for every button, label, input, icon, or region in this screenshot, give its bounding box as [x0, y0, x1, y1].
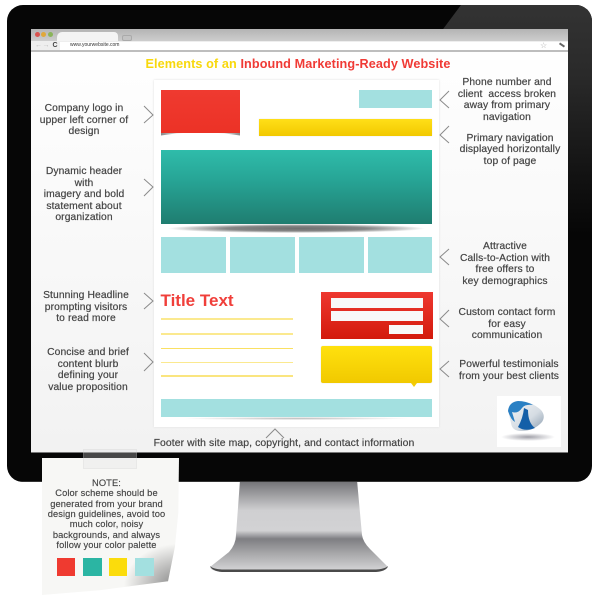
- label: content blurb: Concise and brief: [47, 347, 129, 358]
- title text: Title Text: [160, 291, 234, 310]
- label: dynamic header: Dynamic header: [46, 166, 122, 177]
- star: ☆: [540, 40, 547, 50]
- swatch red: [57, 558, 75, 576]
- form field 1: [331, 298, 423, 308]
- label: dynamic header: statement about: [46, 200, 122, 212]
- label: headline: Stunning Headline: [43, 290, 129, 301]
- cta 4: [368, 237, 432, 273]
- label: dynamic header: organization: [55, 212, 113, 223]
- note text: generated from your brand: [50, 499, 163, 509]
- note text: much color, noisy: [70, 519, 143, 529]
- label: headline: [43, 290, 129, 324]
- swatch teal: [82, 558, 102, 576]
- label: logo: [40, 103, 128, 137]
- label: phone number: [458, 77, 556, 122]
- label: calls to action: Calls-to-Action with: [460, 252, 550, 264]
- note curl shading: [128, 547, 174, 586]
- url: www.yourwebsite.com: [70, 42, 119, 48]
- monitor frame: [7, 5, 592, 482]
- label: logo: design: [69, 126, 99, 137]
- label: footer: Footer with site map, copyright, and contact information: [154, 438, 414, 449]
- browser chrome: [31, 29, 568, 52]
- testimonial bubble: [321, 346, 432, 383]
- title: Elements of an Inbound Marketing-Ready Website: [146, 57, 450, 71]
- sticky note: [42, 458, 179, 595]
- label: dynamic header: [44, 166, 124, 223]
- calls to action: [161, 237, 432, 273]
- submit button: [389, 324, 423, 334]
- label: dynamic header: imagery and bold: [44, 189, 124, 200]
- label: phone number: away from primary: [464, 100, 550, 111]
- label: testimonials: Powerful testimonials: [459, 359, 559, 370]
- label: calls to action: key demographics: [462, 276, 548, 286]
- label: testimonials: [459, 359, 559, 382]
- cta 2: [230, 237, 295, 273]
- swatch aqua: [134, 558, 154, 576]
- note text: follow your color palette: [56, 540, 157, 550]
- footer shadow: [184, 416, 409, 420]
- note text: Color scheme should be: [55, 488, 158, 498]
- label: phone number: navigation: [483, 112, 531, 122]
- address bar: [60, 42, 568, 50]
- label: primary navigation: [460, 132, 560, 166]
- label: headline: prompting visitors: [45, 302, 127, 312]
- wireframe panel: [154, 80, 439, 427]
- navigation bar: [259, 119, 432, 136]
- note text: design guidelines, avoid too: [48, 509, 165, 519]
- label: logo: Company logo in: [45, 103, 123, 114]
- logo block: [161, 90, 240, 132]
- content lines: [161, 318, 293, 377]
- label: calls to action: [460, 241, 550, 286]
- label: contact form: [458, 307, 555, 341]
- label: content blurb: [47, 347, 129, 392]
- browser tab: [57, 32, 118, 41]
- label: contact form: communication: [472, 330, 542, 341]
- label: contact form: Custom contact form: [459, 307, 555, 318]
- nav icons: ←→ C: [35, 42, 58, 49]
- swatch yellow: [109, 558, 127, 576]
- label: content blurb: content blurb: [58, 358, 118, 370]
- cta 1: [161, 237, 226, 273]
- note text: NOTE:: [92, 478, 121, 488]
- tape: [83, 449, 137, 469]
- label: primary navigation: Primary navigation: [466, 132, 554, 144]
- label: dynamic header: with: [75, 178, 93, 188]
- label: testimonials: from your best clients: [459, 370, 559, 382]
- label: primary navigation: top of page: [484, 156, 536, 166]
- footer bar: [161, 399, 432, 416]
- note text: backgrounds, and always: [53, 530, 160, 540]
- label: headline: to read more: [56, 313, 116, 324]
- hero shadow: [168, 224, 425, 233]
- label: calls to action: free offers to: [475, 264, 535, 275]
- window buttons: [34, 32, 40, 37]
- wrench: [559, 42, 565, 48]
- company logo: [497, 396, 561, 447]
- screen: [31, 29, 568, 453]
- label: contact form: for easy: [488, 318, 526, 330]
- contact form: [321, 292, 432, 338]
- hero header: [161, 150, 432, 224]
- cta 3: [299, 237, 364, 273]
- form field 2: [331, 311, 423, 320]
- bubble tail: [411, 383, 417, 387]
- phone block: [359, 90, 432, 108]
- label: content blurb: value proposition: [48, 382, 128, 392]
- label: phone number: client access broken: [458, 88, 556, 100]
- label: calls to action: Attractive: [483, 241, 527, 252]
- logo shadow: [161, 133, 240, 136]
- label: phone number: Phone number and: [462, 77, 552, 88]
- label: content blurb: defining your: [58, 370, 118, 381]
- label: primary navigation: displayed horizontally: [460, 144, 560, 155]
- note text: [48, 479, 165, 550]
- label: logo: upper left corner of: [40, 114, 128, 126]
